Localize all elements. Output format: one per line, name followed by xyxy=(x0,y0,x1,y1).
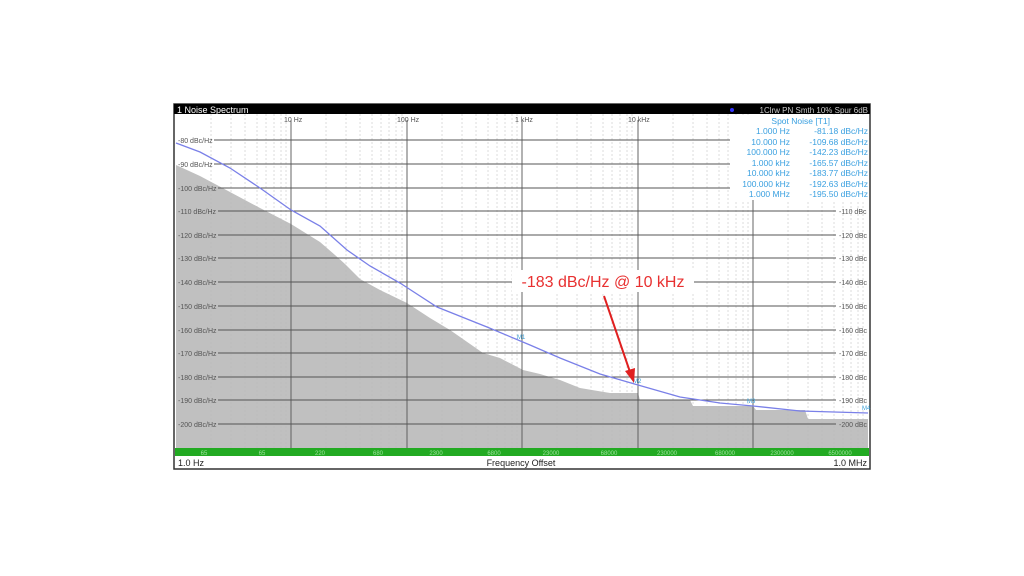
y axis labels left: -140 dBc/Hz xyxy=(178,280,217,287)
green bar: 6800 xyxy=(487,451,501,457)
y axis labels right: -140 dBc xyxy=(839,280,868,287)
green bar: 2300 xyxy=(429,451,443,457)
spot noise table: 10.000 kHz xyxy=(747,168,790,178)
y axis labels left: -180 dBc/Hz xyxy=(178,375,217,382)
green bar: 23000 xyxy=(543,451,560,457)
spot noise table: 1.000 MHz xyxy=(749,189,790,199)
y axis labels right: -110 dBc xyxy=(839,209,867,216)
y axis labels left: -80 dBc/Hz xyxy=(178,138,213,145)
x axis decade labels xyxy=(284,117,650,124)
y axis labels left: -160 dBc/Hz xyxy=(178,328,217,335)
y axis labels right: -180 dBc xyxy=(839,375,868,382)
green bar: 2300000 xyxy=(770,451,794,457)
y axis labels left: -200 dBc/Hz xyxy=(178,422,217,429)
spot noise table: -81.18 dBc/Hz xyxy=(814,126,868,136)
spot noise table: 100.000 kHz xyxy=(742,179,790,189)
y axis labels left: -150 dBc/Hz xyxy=(178,304,217,311)
green bar: 680 xyxy=(373,451,384,457)
spot noise table: 100.000 Hz xyxy=(747,147,790,157)
y axis labels right: -150 dBc xyxy=(839,304,868,311)
green bar: 68000 xyxy=(601,451,618,457)
y axis labels left: -130 dBc/Hz xyxy=(178,256,217,263)
panel: noise spectrum chart xyxy=(174,104,871,469)
markers: M3 xyxy=(747,399,756,405)
y axis labels left: -100 dBc/Hz xyxy=(178,186,217,193)
grid xyxy=(211,114,863,448)
x axis decade labels: 100 Hz xyxy=(397,117,420,124)
spot noise table: Spot Noise [T1] xyxy=(771,116,830,126)
bottom axis labels xyxy=(178,458,867,468)
green bar: 65 xyxy=(201,451,208,457)
spot noise table: -183.77 dBc/Hz xyxy=(809,168,868,178)
spot noise table: -192.63 dBc/Hz xyxy=(809,179,868,189)
y axis labels right xyxy=(839,209,868,429)
green bar: 6500000 xyxy=(828,451,852,457)
y axis labels left: -110 dBc/Hz xyxy=(178,209,216,216)
y axis labels right: -120 dBc xyxy=(839,233,868,240)
x axis decade labels: 1 kHz xyxy=(515,117,533,124)
spot noise table: 1.000 kHz xyxy=(752,158,790,168)
green bar: 680000 xyxy=(715,451,736,457)
y axis labels left: -120 dBc/Hz xyxy=(178,233,217,240)
markers: M1 xyxy=(517,335,526,341)
x axis decade labels: 10 kHz xyxy=(628,117,650,124)
bottom axis labels: 1.0 MHz xyxy=(833,458,867,468)
spot noise table: -195.50 dBc/Hz xyxy=(809,189,868,199)
y axis labels right: -130 dBc xyxy=(839,256,868,263)
spot noise table xyxy=(730,115,869,200)
y axis labels right: -170 dBc xyxy=(839,351,868,358)
y axis labels right: -160 dBc xyxy=(839,328,868,335)
title bar: 1Clrw PN Smth 10% Spur 6dB xyxy=(760,106,868,115)
gray trace area xyxy=(176,165,868,448)
y axis labels left: -90 dBc/Hz xyxy=(178,162,213,169)
blue trace xyxy=(176,143,868,413)
y axis labels left: -170 dBc/Hz xyxy=(178,351,217,358)
x axis decade labels: 10 Hz xyxy=(284,117,303,124)
y axis labels right: -190 dBc xyxy=(839,398,868,405)
green bar xyxy=(175,448,869,457)
y axis labels left xyxy=(178,138,217,429)
green bar: 65 xyxy=(259,451,266,457)
green bar: 220 xyxy=(315,451,326,457)
bottom axis labels: Frequency Offset xyxy=(487,458,556,468)
arrow to 10 kHz point xyxy=(604,296,635,383)
bottom axis labels: 1.0 Hz xyxy=(178,458,205,468)
y axis labels right: -200 dBc xyxy=(839,422,868,429)
spot noise table: 1.000 Hz xyxy=(756,126,790,136)
markers xyxy=(517,335,871,412)
y axis labels left: -190 dBc/Hz xyxy=(178,398,217,405)
title bar: 1 Noise Spectrum xyxy=(177,105,249,115)
spot noise table: -165.57 dBc/Hz xyxy=(809,158,868,168)
title bar xyxy=(174,104,870,115)
spot noise table: 10.000 Hz xyxy=(751,137,790,147)
spot noise table: -109.68 dBc/Hz xyxy=(809,137,868,147)
markers: M2 xyxy=(633,379,642,385)
callout: -183 dBc/Hz @ 10 kHz: -183 dBc/Hz @ 10 kHz xyxy=(522,274,684,291)
markers: M4 xyxy=(862,406,871,412)
green bar: 230000 xyxy=(657,451,678,457)
spot noise table: -142.23 dBc/Hz xyxy=(809,147,868,157)
callout: -183 dBc/Hz @ 10 kHz xyxy=(512,270,694,292)
